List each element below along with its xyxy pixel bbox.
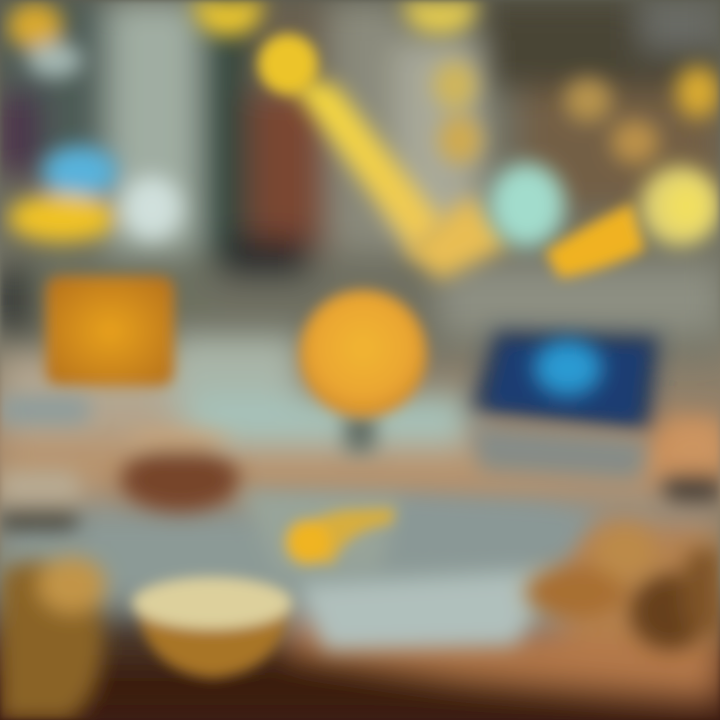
orange cube: [46, 276, 174, 386]
background wall: [0, 0, 720, 350]
cream bowl bottom center: [132, 577, 292, 678]
right glowing cluster: [489, 163, 720, 278]
yellow diagonal arrow: [258, 34, 510, 280]
pastries bottom right: [525, 524, 720, 650]
orange sphere on stand: [299, 290, 427, 452]
brown bowl on desk: [120, 430, 240, 512]
hanging lights, top row: [7, 0, 720, 164]
desk surface: [0, 335, 720, 720]
yellow arc mark on mat: [286, 508, 395, 565]
left glowing cluster: [8, 146, 182, 242]
laptop: [470, 330, 660, 480]
cup right edge: [662, 424, 720, 502]
round fruit bottom left: [0, 557, 106, 720]
left plate stack: [0, 396, 92, 530]
keyboard: [240, 490, 600, 650]
